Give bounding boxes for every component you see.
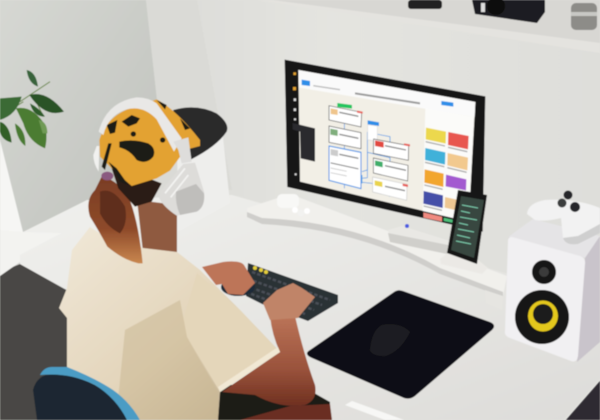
left wall	[0, 0, 157, 232]
sleeve hem	[218, 347, 280, 392]
person	[33, 97, 332, 420]
desk corner shadow	[566, 381, 600, 420]
shelf	[258, 0, 600, 53]
cap	[99, 99, 200, 186]
white box behind person	[177, 135, 230, 232]
leaves	[0, 70, 64, 148]
desk front highlight	[345, 401, 404, 420]
woofer	[515, 290, 569, 344]
small driver	[532, 260, 556, 284]
monitor riser	[247, 194, 507, 310]
earbuds and case	[277, 194, 310, 216]
flowchart	[329, 103, 410, 200]
desk	[20, 195, 600, 420]
right panel	[423, 108, 474, 222]
plant	[0, 70, 64, 148]
mouse on mat	[370, 324, 410, 356]
left hand	[202, 261, 255, 295]
cap patches	[102, 100, 190, 185]
connectors	[344, 123, 390, 197]
wall pillar	[146, 0, 232, 190]
node 1	[329, 103, 363, 127]
monitor bezel	[285, 60, 485, 232]
tag and dropdown	[368, 120, 379, 141]
sleeve	[183, 273, 280, 392]
phone stand	[440, 251, 488, 274]
shirt	[59, 227, 280, 420]
shirt shadow	[118, 300, 218, 420]
mouse mat	[307, 290, 494, 399]
template cards	[423, 128, 469, 224]
sidebar icons	[293, 72, 297, 175]
lower wall	[0, 264, 70, 420]
node 2	[329, 126, 361, 149]
lower arm shadow	[240, 404, 332, 420]
speaker	[505, 219, 600, 362]
window panel	[0, 140, 23, 232]
neck	[137, 200, 177, 254]
monitor screen	[298, 70, 475, 222]
dark popup menu	[293, 123, 315, 162]
right wall	[0, 0, 600, 320]
ear cup	[159, 163, 204, 216]
node 3	[329, 146, 361, 189]
game controller	[527, 190, 600, 244]
ponytail	[88, 177, 143, 263]
phone	[447, 190, 487, 264]
hair under cap	[110, 163, 162, 207]
dark lap	[218, 385, 330, 420]
shelf objects	[408, 0, 597, 30]
desktop box	[388, 224, 450, 254]
monitor	[285, 60, 485, 232]
window sill	[0, 230, 62, 276]
left ear cushion	[93, 146, 99, 172]
right hand	[263, 283, 315, 320]
chair	[33, 367, 140, 420]
toolbar buttons	[302, 80, 453, 107]
cap brim	[173, 107, 227, 160]
forearm	[222, 316, 316, 406]
toolbar	[298, 70, 475, 117]
node 5	[373, 158, 408, 181]
node 4	[373, 139, 410, 160]
dark mouse	[221, 278, 255, 296]
scrunchie	[101, 172, 113, 180]
node 6	[373, 177, 408, 200]
keyboard	[221, 263, 338, 321]
headphone band	[99, 97, 182, 152]
